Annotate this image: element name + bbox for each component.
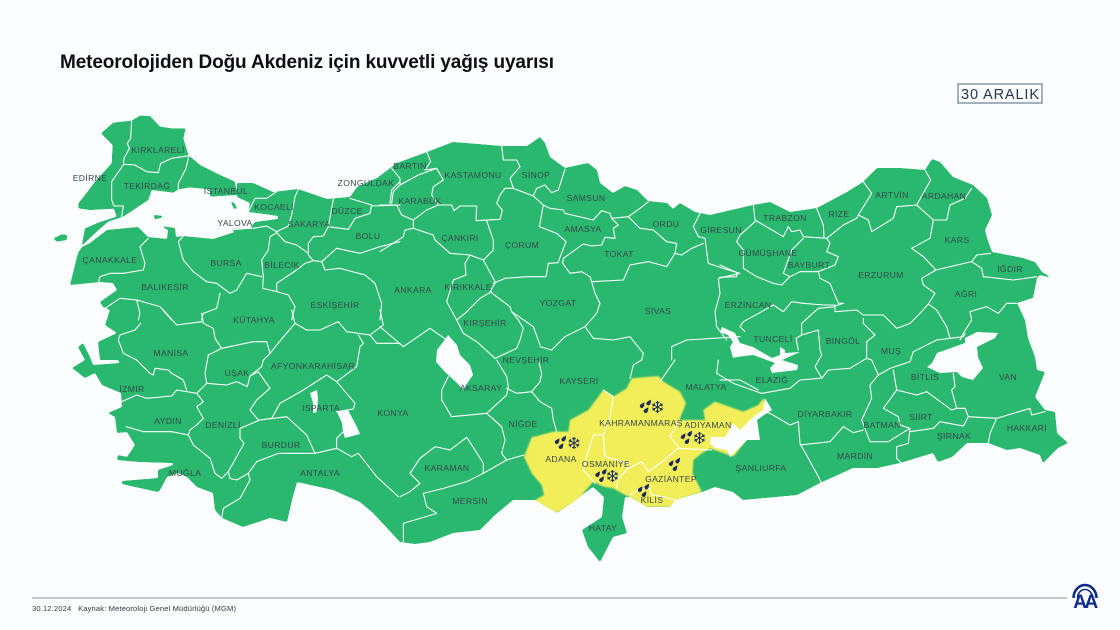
province name labels: BİLECİK [264,260,300,270]
province name labels: AYDIN [154,416,182,426]
province name labels: BOLU [356,231,380,241]
province name labels: ORDU [653,219,679,229]
province name labels: SAMSUN [567,193,605,203]
province name labels: TUNCELİ [753,334,793,344]
logo: AA [1073,585,1098,613]
province name labels: ESKİŞEHİR [310,300,360,310]
province name labels: MALATYA [685,382,727,392]
province name labels: AMASYA [564,224,602,234]
province name labels: AĞRI [955,289,977,299]
province name labels: BATMAN [863,420,901,430]
province name labels: ERZURUM [858,270,904,280]
province name labels: YOZGAT [540,298,577,308]
province name labels: HATAY [589,523,617,533]
province borders [98,121,1045,542]
province name labels: BALIKESİR [141,282,189,292]
province name labels: KARS [945,235,969,245]
province name labels: HAKKARİ [1007,423,1047,433]
weather icons: rain and snow [555,400,706,497]
map of Turkey [53,116,1068,562]
province name labels: ELAZIĞ [756,375,788,385]
province name labels: SİNOP [522,170,550,180]
province name labels: KIRIKKALE [444,282,492,292]
province name labels: ANKARA [394,285,432,295]
province name labels: YALOVA [217,218,253,228]
province name labels: MUĞLA [169,468,201,478]
province name labels: BURSA [210,258,242,268]
province name labels: NİĞDE [509,419,537,429]
land: Thrace and islands [53,116,237,246]
province name labels: TRABZON [763,213,807,223]
province name labels: RİZE [829,209,849,219]
province name labels: KÜTAHYA [233,315,275,325]
province name labels: ŞIRNAK [937,431,971,441]
province name labels: TOKAT [604,249,634,259]
province name labels: MERSİN [452,496,488,506]
province name labels: İĞDIR [997,264,1023,274]
province name labels: KAYSERİ [559,376,599,386]
province name labels: EDİRNE [73,173,107,183]
footer rule [32,598,1067,599]
province name labels: ARTVİN [875,190,909,200]
province name labels: GAZİANTEP [645,474,697,484]
logo: AA: AA [1073,592,1098,613]
province name labels: ADIYAMAN [684,420,732,430]
province name labels: İZMİR [119,384,145,394]
province name labels: BARTIN [393,161,427,171]
province name labels: BİNGÖL [826,336,860,346]
province name labels: ÇORUM [505,240,539,250]
province name labels: ERZİNCAN [725,300,771,310]
province name labels: VAN [999,372,1017,382]
province name labels: KARAMAN [425,463,469,473]
province name labels: KASTAMONU [445,170,501,180]
province name labels: BİTLİS [911,372,939,382]
province name labels [73,145,1047,533]
province name labels: ÇANAKKALE [83,255,137,265]
province name labels: KAHRAMANMARAŞ [599,418,683,428]
province name labels: KİLİS [641,495,663,505]
title: Meteorolojiden Doğu Akdeniz için kuvvetli yağış uyarısı [60,52,554,73]
province name labels: KOCAELİ [254,202,294,212]
province name labels: BAYBURT [788,260,831,270]
province name labels: MUŞ [881,346,901,356]
province name labels: TEKİRDAĞ [124,181,170,191]
lakes and reservoirs [310,327,998,457]
province name labels: DÜZCE [331,206,363,216]
province name labels: ISPARTA [302,403,340,413]
province name labels: ANTALYA [300,468,340,478]
province name labels: UŞAK [225,368,249,378]
province name labels: ŞANLIURFA [736,463,786,473]
province name labels: AKSARAY [460,383,502,393]
province name labels: ADANA [545,454,577,464]
province name labels: ARDAHAN [922,191,966,201]
land masses with warning area [53,116,1068,562]
province name labels: GÜMÜŞHANE [738,248,798,258]
province name labels: KONYA [377,408,409,418]
province name labels: ÇANKIRI [441,233,479,243]
province name labels: DİYARBAKIR [798,409,852,419]
province name labels: SİİRT [909,412,933,422]
province name labels: MARDİN [837,451,873,461]
date badge: 30 ARALIK: 30 ARALIK [961,87,1039,103]
province name labels: SİVAS [645,306,671,316]
province name labels: SAKARYA [288,219,330,229]
province name labels: İSTANBUL [204,186,248,196]
warning area: yellow provinces [524,376,767,513]
province name labels: NEVŞEHİR [503,355,549,365]
province name labels: GİRESUN [700,225,742,235]
province name labels: BURDUR [262,440,300,450]
province name labels: ZONGULDAK [338,178,394,188]
province name labels: OSMANİYE [582,459,630,469]
province name labels: MANİSA [153,348,189,358]
province name labels: KIRKLARELİ [131,145,185,155]
province name labels: DENİZLİ [205,420,241,430]
province name labels: KIRŞEHİR [463,318,507,328]
province name labels: AFYONKARAHİSAR [271,361,355,371]
province name labels: KARABÜK [398,196,442,206]
source line: 30.12.2024 Kaynak: Meteoroloji Genel Müdürlüğü (MGM) [32,604,236,613]
land: Anatolia [70,137,1068,562]
